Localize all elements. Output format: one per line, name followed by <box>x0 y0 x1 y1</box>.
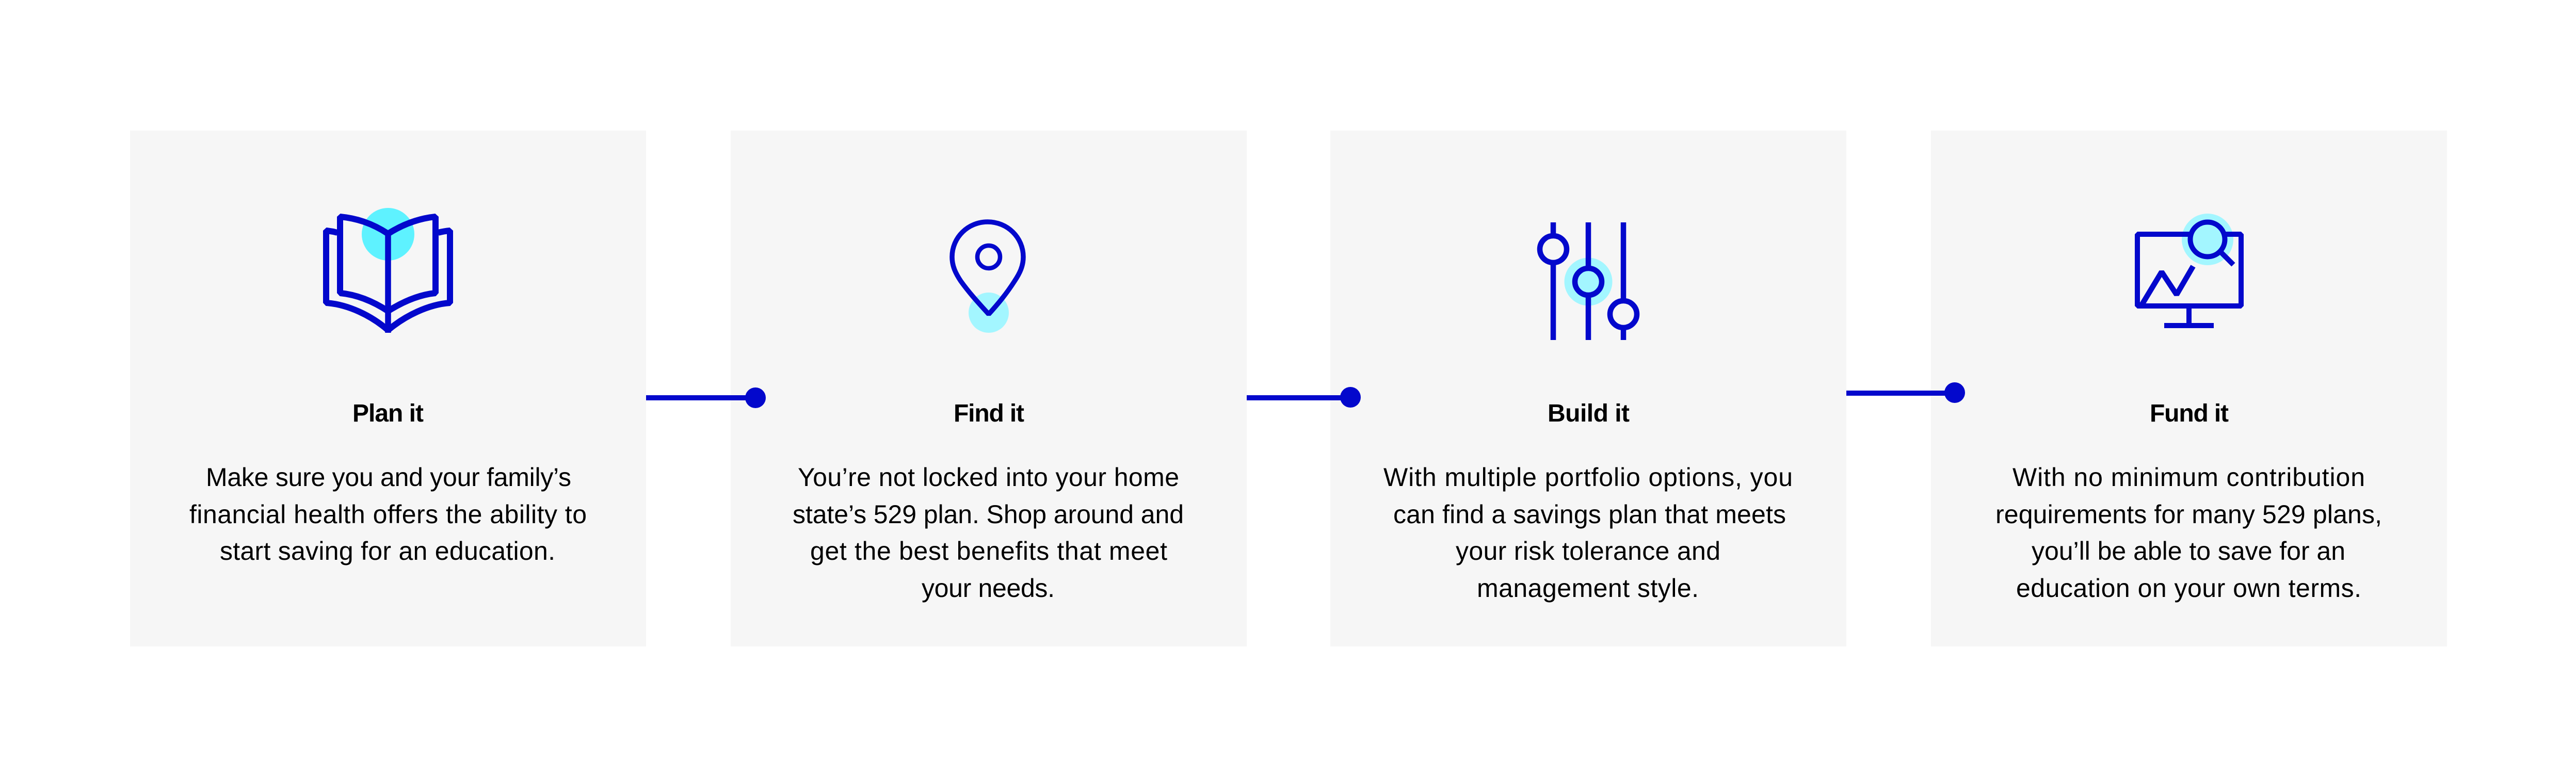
text: Build it description: can find a savings plan that meets <box>1393 500 1786 529</box>
text: Build it description: With multiple portfolio options, you <box>1383 463 1793 492</box>
panel: Build it <box>1330 131 1846 646</box>
icon: open book <box>326 208 450 333</box>
text: Fund it description <box>1995 463 2382 603</box>
text: Plan it description <box>189 463 587 565</box>
text: Find it description: your needs. <box>922 574 1055 603</box>
text: Fund it description: education on your own terms. <box>2016 574 2361 603</box>
arrow: connector from Plan it to Find it <box>646 387 766 408</box>
text: Build it description <box>1383 463 1793 603</box>
text: Plan it description: start saving for an education. <box>220 537 555 565</box>
icon: map pin <box>952 222 1023 333</box>
text: Plan it description: financial health offers the ability to <box>189 500 587 529</box>
arrow: connector from Build it to Fund it <box>1846 382 1965 403</box>
text: Find it description: You’re not locked into your home <box>798 463 1179 492</box>
text: Find it description: state’s 529 plan. Shop around and <box>793 500 1184 529</box>
heading: Plan it: Plan it <box>352 400 424 427</box>
icon: sliders <box>1540 222 1637 340</box>
text: Fund it description: you’ll be able to save for an <box>2032 537 2345 565</box>
text: Plan it description: Make sure you and your family’s <box>206 463 571 492</box>
heading: Fund it: Fund it <box>2150 400 2229 427</box>
panel: Find it <box>731 131 1247 646</box>
panel: Plan it <box>130 131 646 646</box>
text: Find it description: get the best benefits that meet <box>810 537 1167 565</box>
icon: monitor with chart and magnifier <box>2137 214 2241 326</box>
panel: Fund it <box>1931 131 2447 646</box>
arrow: connector from Find it to Build it <box>1247 387 1361 408</box>
heading: Find it: Find it <box>954 400 1024 427</box>
text: Fund it description: requirements for many 529 plans, <box>1995 500 2382 529</box>
text: Find it description <box>793 463 1184 603</box>
heading: Build it: Build it <box>1548 400 1630 427</box>
text: Fund it description: With no minimum contribution <box>2013 463 2365 492</box>
text: Build it description: management style. <box>1477 574 1699 603</box>
text: Build it description: your risk tolerance and <box>1456 537 1720 565</box>
